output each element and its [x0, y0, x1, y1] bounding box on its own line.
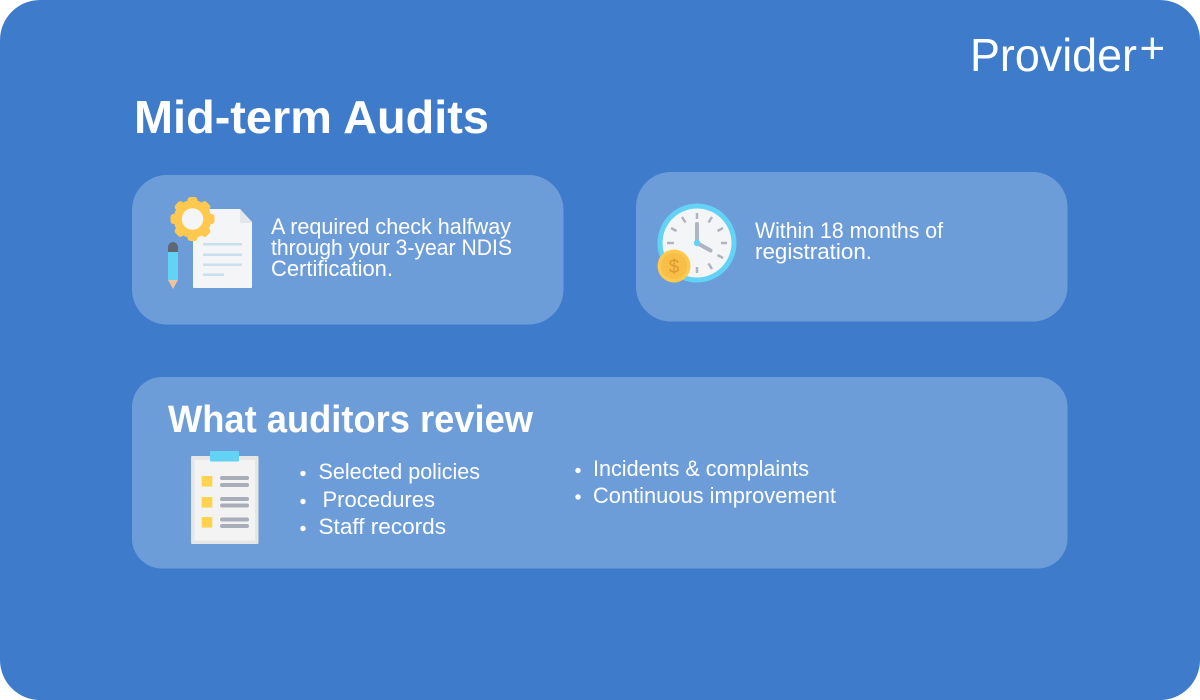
logo: Provider: [970, 29, 1137, 81]
timing text: Within 18 months of: [755, 218, 944, 243]
timing text: [755, 218, 944, 264]
title: Mid-term Audits: [134, 91, 489, 143]
timing text: registration.: [755, 239, 872, 264]
icon: clock with coin: [658, 204, 736, 282]
icon: document with gear and pencil: [168, 197, 252, 289]
list: left column: [300, 459, 480, 539]
list: right column: Incidents & complaints: [593, 456, 809, 481]
list: right column: Continuous improvement: [593, 483, 836, 508]
list: left column: Procedures: [322, 487, 435, 512]
icon: clock with coin: $: [669, 257, 680, 278]
logo: +: [1140, 24, 1165, 73]
panel: what auditors review: [132, 377, 1068, 568]
icon: clipboard: [191, 451, 258, 544]
list: left column: Staff records: [318, 514, 446, 539]
definition text: Certification.: [271, 256, 393, 281]
definition text: [271, 214, 512, 281]
definition text: A required check halfway: [271, 214, 511, 239]
panel: timing: [636, 172, 1068, 322]
panel: definition: [132, 175, 564, 324]
list: right column: [575, 456, 836, 508]
heading: What auditors review: [168, 399, 533, 441]
list: left column: Selected policies: [318, 459, 480, 484]
definition text: through your 3-year NDIS: [271, 235, 512, 260]
